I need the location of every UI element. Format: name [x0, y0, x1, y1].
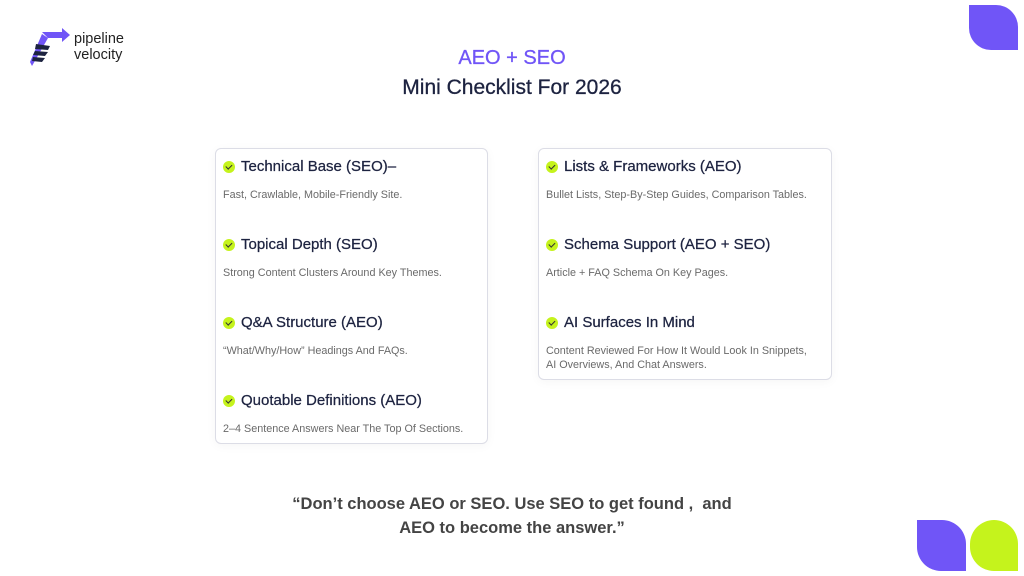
item: lists — [546, 158, 807, 201]
quote: “Don’t choose AEO or SEO. Use SEO to get found , and — [292, 495, 732, 513]
shape: top right — [969, 5, 1018, 50]
title — [402, 47, 622, 99]
item: Q&A: “What/Why/How” Headings And FAQs. — [223, 345, 408, 357]
title: Mini Checklist For 2026 — [402, 76, 622, 99]
logo — [30, 28, 124, 66]
item: AI surfaces: AI Surfaces In Mind — [564, 314, 695, 331]
quote — [292, 495, 732, 537]
item: technical base: Technical Base (SEO)– — [241, 158, 396, 175]
shape: bottom lime — [970, 520, 1018, 571]
item: AI surfaces — [546, 314, 807, 371]
item: technical base: Fast, Crawlable, Mobile-Friendly Site. — [223, 189, 402, 201]
item: topical depth: Topical Depth (SEO) — [241, 236, 378, 253]
panel: left card — [215, 148, 488, 444]
item: lists: Bullet Lists, Step-By-Step Guides, Comparison Tables. — [546, 189, 807, 201]
quote: AEO to become the answer.” — [399, 519, 625, 537]
item: definitions: Quotable Definitions (AEO) — [241, 392, 422, 409]
item: schema — [546, 236, 770, 279]
item: schema: Article + FAQ Schema On Key Pages. — [546, 267, 728, 279]
logo: pipeline — [74, 31, 124, 47]
item: AI surfaces: Content Reviewed For How It Would Look In Snippets, — [546, 345, 807, 357]
panel: right card — [538, 148, 832, 380]
item: AI surfaces: AI Overviews, And Chat Answers. — [546, 359, 707, 371]
item: topical depth: Strong Content Clusters Around Key Themes. — [223, 267, 442, 279]
shape: bottom purple — [917, 520, 966, 571]
item: lists: Lists & Frameworks (AEO) — [564, 158, 742, 175]
item: Q&A — [223, 314, 408, 357]
item: topical depth — [223, 236, 442, 279]
item: definitions — [223, 392, 463, 435]
item: Q&A: Q&A Structure (AEO) — [241, 314, 383, 331]
title: AEO + SEO — [458, 47, 566, 69]
logo: velocity — [74, 47, 122, 63]
item: definitions: 2–4 Sentence Answers Near The Top Of Sections. — [223, 423, 463, 435]
item: technical base — [223, 158, 402, 201]
item: schema: Schema Support (AEO + SEO) — [564, 236, 770, 253]
